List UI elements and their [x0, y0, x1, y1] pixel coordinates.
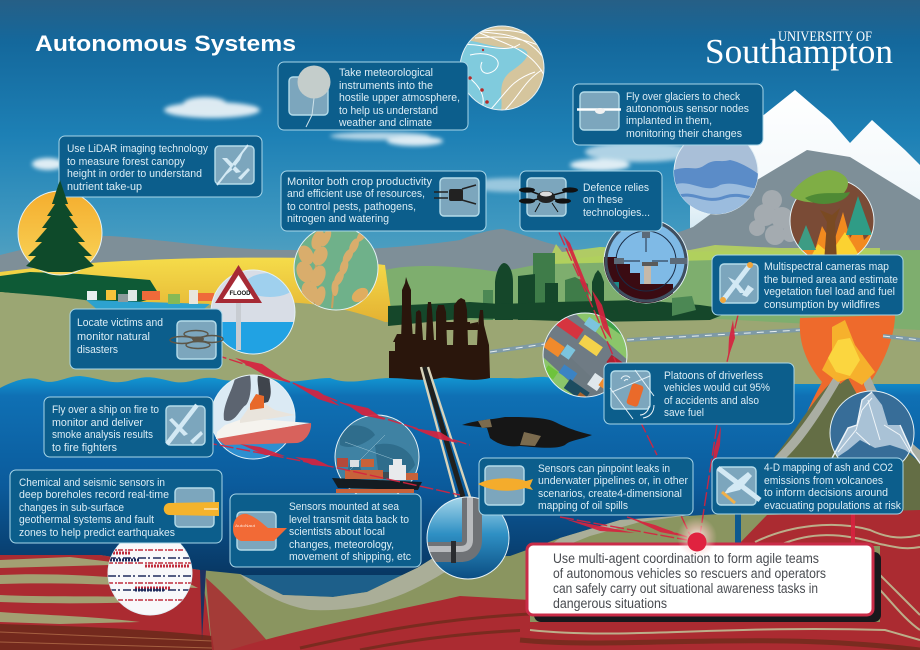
balloon text: instruments into the: [339, 80, 433, 92]
sky background: [0, 0, 920, 300]
callout: multi-agent coordination: [527, 544, 873, 615]
smoke cloud: [749, 190, 798, 245]
hub dot: [688, 532, 706, 552]
icon: defence drone: [519, 178, 578, 216]
panel: leaks: [478, 458, 693, 515]
LiDAR text: [67, 143, 208, 193]
multispectral text: Multispectral cameras map: [764, 261, 889, 273]
icon: borehole sensor: [164, 488, 219, 527]
tree over LiDAR panel: [52, 180, 68, 204]
crops text: nitrogen and watering: [287, 213, 389, 225]
ship fire text: Fly over a ship on fire to: [52, 404, 159, 416]
seabed strata: [0, 510, 920, 650]
icon: sea buoy: AutoNaut: [235, 524, 255, 528]
fault line: [200, 570, 206, 640]
refinery silhouette: [389, 277, 490, 380]
circle: forest fire: [790, 170, 874, 263]
leaks text: underwater pipelines or, in other: [538, 475, 688, 487]
balloon text: to help us understand: [339, 105, 438, 117]
panel: LiDAR: [59, 136, 262, 197]
circle: leaking pipe: [425, 490, 509, 579]
circle: wheat: [293, 226, 378, 310]
village and lake: [86, 290, 214, 312]
glacier text: implanted in them,: [626, 115, 712, 127]
volcano mapping text: 4-D mapping of ash and CO2: [764, 462, 893, 474]
forest band: [0, 272, 160, 305]
panel: ship fire: [44, 397, 213, 457]
defence text: Defence relies: [583, 182, 649, 194]
icon: sea buoy: [233, 512, 287, 550]
icon: survey plane: [215, 145, 254, 185]
leaks text: mapping of oil spills: [538, 500, 628, 512]
icon: fire plane: [720, 262, 758, 303]
green hills: [385, 250, 920, 345]
panel: boreholes: [10, 470, 222, 543]
boreholes text: changes in sub-surface: [19, 502, 124, 514]
panel: flood: [70, 309, 223, 369]
boreholes text: deep boreholes record real-time: [19, 489, 169, 501]
circle outline: weather: [460, 26, 544, 110]
platoons text: [664, 370, 770, 419]
sea level text: movement of shipping, etc: [289, 551, 411, 563]
balloon text: [338, 67, 460, 129]
callout: multi-agent coordination: dangerous situations: [553, 596, 667, 611]
platoons text: save fuel: [664, 407, 704, 419]
yellow crop field: [0, 258, 395, 340]
icon: crop drone: [434, 178, 479, 216]
boreholes text: zones to help predict earthquakes: [19, 527, 175, 539]
LiDAR text: nutrient take-up: [67, 181, 142, 193]
sea level text: changes, meteorology,: [289, 539, 394, 551]
panel: glacier: [573, 84, 763, 145]
circle: traffic: [542, 312, 628, 398]
leaks text: Sensors can pinpoint leaks in: [538, 463, 670, 475]
oil spill: [462, 417, 592, 448]
volcano mapping text: [764, 462, 901, 512]
road: [490, 330, 920, 352]
crops text: Monitor both crop productivity: [287, 176, 432, 188]
flood text: Locate victims and: [77, 317, 163, 329]
container ship: [332, 458, 422, 493]
glacier text: Fly over glaciers to check: [626, 91, 740, 103]
panel: platoons: [604, 363, 794, 424]
platoons text: Platoons of driverless: [664, 370, 763, 382]
clouds: [32, 97, 695, 192]
ship fire text: to fire fighters: [52, 442, 117, 454]
circle: weather map: [461, 26, 544, 110]
glacier text: autonomous sensor nodes: [626, 103, 749, 115]
sea: [0, 376, 920, 575]
hub glow: [677, 517, 717, 557]
circle: ship on fire: [211, 375, 311, 460]
khaki land: [0, 292, 920, 420]
panel: volcano mapping: [712, 458, 903, 514]
city skyline: [388, 253, 735, 326]
crops text: to control pests, pathogens,: [287, 201, 416, 213]
icon: weather balloon: [289, 66, 330, 127]
volcano: [770, 315, 920, 530]
icon: underwater glider: [478, 466, 533, 505]
circle: globe and container ship: [332, 415, 422, 499]
callout: multi-agent coordination: Use multi-agent coordination to form agile teams: [553, 551, 819, 566]
balloon text: hostile upper atmosphere,: [339, 92, 460, 104]
boreholes text: Chemical and seismic sensors in: [19, 477, 165, 489]
defence text: technologies...: [583, 207, 650, 219]
flood text: [77, 317, 163, 356]
circle: glacier: [674, 146, 758, 214]
circle: forest tree: [18, 180, 102, 275]
circle: flood: [211, 265, 295, 356]
glacier text: [626, 91, 749, 140]
sea level text: [289, 501, 411, 563]
volcano mapping text: to inform decisions around: [764, 487, 888, 499]
panel: sea level: [230, 494, 421, 567]
sea level text: scientists about local: [289, 526, 385, 538]
logo: University of Southampton: UNIVERSITY OF: [778, 29, 872, 45]
LiDAR text: Use LiDAR imaging technology: [67, 143, 208, 155]
borehole: [735, 514, 741, 546]
flood text: disasters: [77, 344, 118, 356]
grey mountains: [0, 150, 920, 290]
flood text: monitor natural: [77, 331, 150, 343]
LiDAR text: height in order to understand: [67, 168, 202, 180]
multispectral text: consumption by wildfires: [764, 299, 880, 311]
volcano mapping text: emissions from volcanoes: [764, 475, 883, 487]
icon: glider: [577, 92, 621, 130]
logo: University of Southampton: Southampton: [705, 32, 893, 71]
circle: sniper scope: [604, 219, 688, 305]
circle: volcano LiDAR map: [830, 390, 920, 464]
panel: defence: [519, 171, 662, 231]
panel: balloon: [278, 62, 468, 130]
balloon text: weather and climate: [338, 117, 432, 129]
glacier text: monitoring their changes: [626, 128, 742, 140]
balloon text: Take meteorological: [339, 67, 433, 79]
flood sign: FLOOD: [230, 290, 251, 297]
callout shadow: [534, 552, 881, 622]
panel: multispectral: [712, 255, 903, 315]
icon: ash plane: [717, 467, 760, 505]
panel: crops: [281, 171, 486, 231]
LiDAR text: to measure forest canopy: [67, 156, 185, 168]
callout: multi-agent coordination: can safely carry out situational awareness tasks in: [553, 581, 818, 596]
title: Autonomous Systems: [35, 31, 296, 56]
multispectral text: [764, 261, 898, 311]
burning ship: [216, 394, 311, 445]
defence text: on these: [583, 194, 623, 206]
swarm links: [203, 217, 855, 546]
platoons text: vehicles would cut 95%: [664, 382, 770, 394]
sea level text: level transmit data back to: [289, 514, 409, 526]
multispectral text: vegetation fuel load and fuel: [764, 286, 895, 298]
defence text: [583, 182, 650, 219]
icon: quadcopter: [170, 321, 223, 359]
subsea pipelines: [421, 367, 470, 497]
leaks text: scenarios, create4-dimensional: [538, 488, 682, 500]
grass strip: [550, 244, 880, 264]
sea level text: Sensors mounted at sea: [289, 501, 400, 513]
ship fire text: [52, 404, 159, 454]
multispectral text: the burned area and estimate: [764, 274, 898, 286]
callout: multi-agent coordination: of autonomous vehicles so rescuers and operators: [553, 566, 826, 581]
ship fire text: smoke analysis results: [52, 429, 153, 441]
ship fire text: monitor and deliver: [52, 417, 143, 429]
icon: driverless car: [610, 370, 654, 419]
snowy mountains: [690, 90, 920, 260]
crops text: and efficient use of resources,: [287, 188, 425, 200]
leaks text: [538, 463, 688, 512]
circle: seismograph: [108, 544, 192, 616]
boreholes text: [19, 477, 175, 539]
volcano mapping text: evacuating populations at risk: [764, 500, 901, 512]
icon: fire-watch plane: [166, 405, 205, 445]
platoons text: of accidents and also: [664, 395, 759, 407]
boreholes text: geothermal systems and fault: [19, 514, 155, 526]
crops text: [287, 176, 432, 225]
